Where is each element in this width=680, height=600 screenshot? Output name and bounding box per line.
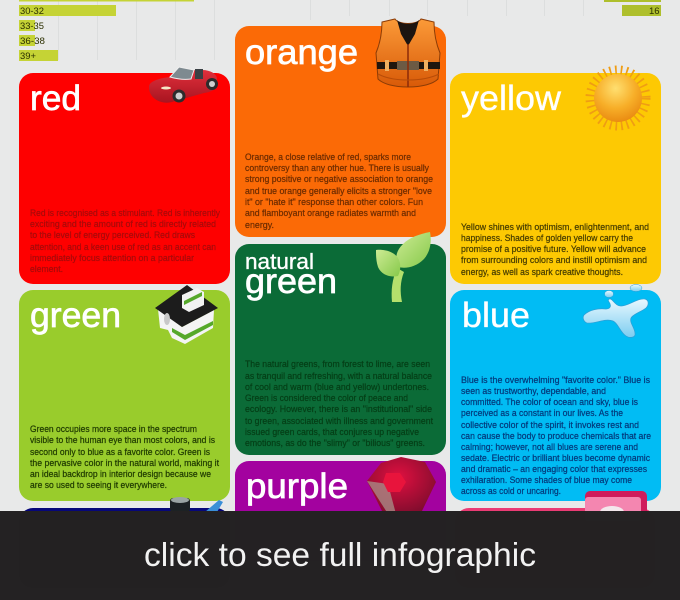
heading: yellow: yellow: [461, 79, 562, 118]
body text: natural green: as tranquil and refreshing, with a natural balance: [245, 371, 432, 381]
age bar chart, left fragment: [19, 0, 194, 62]
body text: natural green: emotions, as do the "slimy" or "bilious" greens.: [245, 438, 425, 448]
body text: red: [30, 208, 220, 274]
body text: orange: controversy than any other hue. There is usually: [245, 163, 429, 173]
heading: red: red: [30, 79, 81, 118]
icon: water splash: [583, 284, 648, 337]
heading: orange: orange: [245, 33, 358, 72]
icon: red car: [149, 67, 218, 103]
panel: red: [19, 67, 230, 284]
body text: yellow: happiness. Shades of golden yellow carry the: [461, 233, 633, 243]
body text: red: Red is recognised as a stimulant. Red is inherently: [30, 208, 220, 218]
body text: red: element.: [30, 264, 63, 274]
panel: green: [19, 285, 230, 501]
body text: yellow: from surrounding colors and instill optimism and: [461, 255, 647, 265]
banner: click to see full infographic: [0, 511, 680, 600]
icon: ruby gem: [367, 457, 436, 515]
panel: natural green: [235, 232, 446, 455]
age bar chart, left fragment: 30-32: [20, 6, 44, 17]
panel: purple: [235, 457, 446, 561]
body text: blue: calming; however, not all blues are serene and: [461, 442, 638, 452]
panel: pink: [455, 491, 655, 588]
body text: blue: exhilaration. Some shades of blue may come: [461, 475, 632, 485]
icon: sprout: [376, 232, 431, 302]
body text: yellow: Yellow shines with optimism, enlightenment, and: [461, 222, 649, 232]
body text: blue: and dramatic – an engaging color that expresses: [461, 464, 647, 474]
banner text: click to see full infographic: [144, 536, 536, 573]
icon: pink camera: [585, 491, 647, 521]
body text: yellow: promise of a positive future. Yellow will advance: [461, 244, 646, 254]
body text: natural green: Green is considered the color of peace and: [245, 393, 408, 403]
icon: life vest: [376, 19, 440, 87]
body text: yellow: [461, 222, 649, 277]
body text: natural green: ecology. However, there is an "institutional" side: [245, 404, 432, 414]
icon: house: [155, 285, 218, 344]
heading: blue: blue: [462, 296, 530, 335]
heading: indigo: indigo: [30, 514, 130, 553]
body text: green: an ideal backdrop in interior design because we: [30, 469, 211, 479]
body text: blue: across as cold or uncaring.: [461, 486, 561, 496]
body text: blue: [461, 375, 651, 496]
body text: green: are so used to seeing it everywhere.: [30, 480, 167, 490]
panel: yellow: [450, 71, 661, 284]
heading: natural green: green: [245, 262, 337, 301]
age bar chart, left fragment: 36-38: [20, 36, 45, 47]
panel: indigo: [19, 497, 230, 588]
body text: blue: committed. The color of ocean and sky, blue is: [461, 397, 638, 407]
body text: natural green: The natural greens, from forest to lime, are seen: [245, 359, 430, 369]
body text: blue: Blue is the overwhelming "favorite color." Blue is: [461, 375, 650, 385]
icon: sun: [591, 71, 645, 125]
body text: green: second only to blue as a favorite color. Green is: [30, 447, 210, 457]
body text: orange: and true orange generally elicits a stronger "love: [245, 186, 432, 196]
body text: orange: strong positive or negative association to orange: [245, 174, 433, 184]
body text: blue: collective color of the spirit, it invokes rest and: [461, 420, 639, 430]
age bar chart, right fragment: [604, 0, 661, 17]
body text: yellow: energy, as well as spark creative thoughts.: [461, 267, 623, 277]
body text: green: Green occupies more space in the spectrum: [30, 424, 197, 434]
age bar chart, right fragment: 16: [649, 6, 660, 17]
heading: purple: purple: [246, 467, 348, 506]
body text: red: attention, and a keen use of red as an accent can: [30, 242, 216, 252]
body text: natural green: to green, associated with illness and government: [245, 416, 433, 426]
body text: red: exciting and the amount of red is directly related: [30, 219, 216, 229]
body text: orange: energy.: [245, 220, 274, 230]
body text: blue: can cause the body to produce chemicals that are: [461, 431, 651, 441]
body text: blue: seen as trustworthy, dependable, and: [461, 386, 606, 396]
body text: orange: [245, 152, 433, 230]
body text: blue: perceived as a constant in our lives. As the: [461, 408, 623, 418]
body text: red: immediately focus attention on a particular: [30, 253, 194, 263]
body text: blue: sedate. Electric or brilliant blues become dynamic: [461, 453, 650, 463]
body text: natural green: issued green cards, that conjures up negative: [245, 427, 419, 437]
age bar chart, left fragment: 39+: [20, 51, 36, 62]
heading: natural green: natural: [245, 249, 314, 274]
body text: red: to the level of energy perceived. Red draws: [30, 230, 195, 240]
heading: green: green: [30, 296, 121, 335]
icon: ink bottle and pen: [170, 497, 223, 512]
body text: orange: Orange, a close relative of red, sparks more: [245, 152, 411, 162]
panel: blue: [450, 284, 661, 501]
body text: green: the pervasive color in the natural world, making it: [30, 458, 219, 468]
body text: orange: and flamboyant orange radiates warmth and: [245, 208, 416, 218]
body text: green: visible to the human eye than most colors, and is: [30, 435, 215, 445]
body text: natural green: [245, 359, 433, 448]
panel: orange: [235, 19, 446, 237]
body text: natural green: of cool and warm (blue and yellow) undertones.: [245, 382, 429, 392]
age bar chart, left fragment: 33-35: [20, 21, 44, 32]
body text: green: [30, 424, 219, 490]
body text: orange: it" or "hate it" response than other colors. Fun: [245, 197, 423, 207]
